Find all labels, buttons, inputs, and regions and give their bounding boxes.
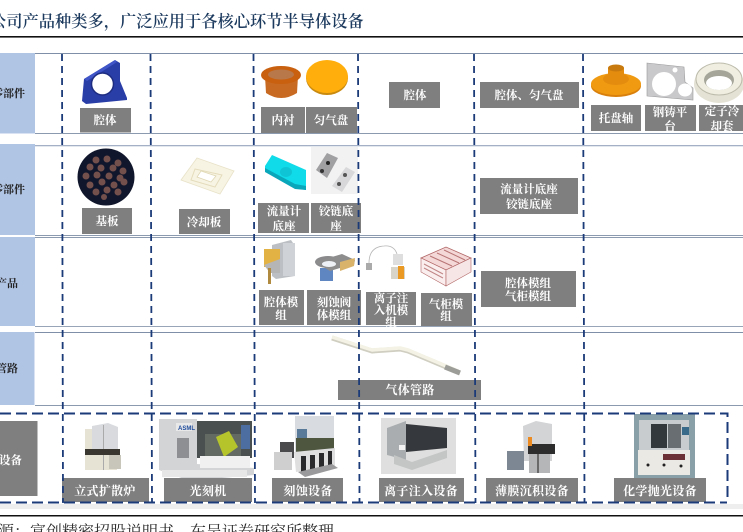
label: chamber (80, 108, 131, 132)
label: thin film equipment: 薄膜沉积设备 (495, 483, 569, 498)
label: ion implant module: 组 (385, 316, 397, 329)
label: substrate: 基板 (96, 214, 119, 228)
label: etch valve module: 刻蚀阀 (317, 295, 351, 309)
label: chamber and gas cabinet modules (481, 271, 576, 307)
label: etching equipment: 刻蚀设备 (283, 483, 333, 498)
label: steel platform: 钢铸平 (653, 105, 688, 119)
label: flowmeter and hinge base: 流量计底座 (500, 182, 558, 196)
title: 公司产品种类多，广泛应用于各核心环节半导体设备 (0, 12, 364, 31)
label: ion implant equipment: 离子注入设备 (384, 483, 458, 498)
icon: tray shaft (591, 64, 641, 97)
label: gas plate (306, 107, 357, 133)
label: vertical furnace: 立式扩散炉 (74, 483, 136, 498)
label: lithography: 光刻机 (190, 483, 226, 498)
label: flowmeter base: 底座 (272, 219, 296, 233)
label: tray shaft: 托盘轴 (599, 111, 634, 125)
label: thin film equipment (486, 478, 578, 502)
label: flowmeter and hinge base (480, 178, 578, 214)
icon: etching machine (274, 416, 338, 477)
label: chamber module: 组 (275, 309, 287, 322)
label: hinge base: 铰链底 (319, 204, 354, 218)
panel: row 4 (0, 332, 743, 406)
icon: ion implanter (381, 418, 456, 474)
label: ion implant module: 入机模 (374, 303, 409, 317)
label: gas plate: 匀气盘 (314, 113, 349, 127)
icon: circuit substrate (78, 148, 134, 206)
label: ion implant equipment (379, 478, 464, 502)
label: cooling plate (179, 209, 230, 234)
label: chamber 2 (389, 82, 440, 108)
label: CMP equipment: 化学抛光设备 (623, 483, 697, 498)
icon: blue chamber body (82, 60, 127, 104)
icon: vertical furnace (85, 423, 121, 470)
label: gas cabinet module (421, 293, 472, 326)
label: gas cabinet module: 组 (440, 310, 452, 323)
label: chamber 2: 腔体 (404, 88, 427, 102)
icon: flowmeter base (265, 155, 306, 190)
label: stator sleeve (699, 104, 743, 133)
icon: lithography machine: ASML (178, 426, 195, 432)
label: etch valve module (307, 290, 361, 325)
icon: cooling plate (181, 158, 234, 194)
label: flowmeter base (258, 203, 309, 233)
label: ion implant module (366, 291, 416, 329)
icon: hinge base (311, 147, 358, 194)
label: stator sleeve: 却套 (710, 119, 734, 133)
icon: gas cabinet module (421, 247, 471, 286)
label: chamber and gas cabinet modules: 腔体模组 (505, 276, 551, 290)
label: liner (261, 107, 305, 133)
panel: row 1 (0, 53, 743, 134)
label: steel platform: 台 (664, 119, 676, 133)
label: etching equipment (272, 478, 343, 502)
panel: equipment heading (0, 421, 38, 496)
icon: lithography machine (159, 419, 254, 481)
label: stator sleeve: 定子冷 (705, 104, 740, 118)
icon: orange liner (261, 66, 301, 98)
icon: ion implanter module (366, 246, 405, 279)
icon: gas distribution plate (306, 60, 348, 95)
label: chamber module: 腔体模 (264, 295, 299, 309)
label: hinge base: 座 (330, 219, 342, 233)
panel: row 2 (0, 144, 743, 236)
icon: steel platform (647, 63, 693, 100)
icon: gas pipeline (332, 337, 460, 373)
icon: etch valve module (315, 254, 355, 281)
icon: thin film deposition (507, 421, 555, 473)
label: ion implant module: 离子注 (374, 291, 409, 305)
label: chamber and gas cabinet modules: 气柜模组 (505, 289, 551, 303)
label: hinge base (311, 203, 361, 233)
label: steel platform (645, 105, 696, 133)
label: vertical furnace (62, 478, 149, 502)
icon: stator cooling sleeve (694, 63, 743, 103)
label: tray shaft (591, 105, 641, 131)
label: substrate (82, 208, 132, 234)
panel: row 3 (0, 237, 743, 327)
label: etch valve module: 体模组 (317, 308, 352, 322)
label: lithography (164, 478, 252, 502)
label: gas pipeline: 气体管路 (385, 382, 435, 397)
label: flowmeter base: 流量计 (267, 204, 302, 218)
label: chamber and gas plate (480, 82, 579, 108)
label: chamber module (259, 290, 304, 325)
label: CMP equipment (614, 478, 706, 502)
label: liner: 内衬 (272, 113, 295, 127)
label: cooling plate: 冷却板 (187, 215, 222, 229)
label: chamber: 腔体 (94, 113, 117, 127)
label: chamber and gas plate: 腔体、匀气盘 (494, 88, 564, 102)
label: gas cabinet module: 气柜模 (429, 297, 464, 311)
icon: CMP equipment (634, 414, 695, 478)
label: flowmeter and hinge base: 铰链底座 (506, 197, 552, 211)
icon: chamber module (264, 240, 295, 284)
label: gas pipeline (338, 380, 481, 400)
